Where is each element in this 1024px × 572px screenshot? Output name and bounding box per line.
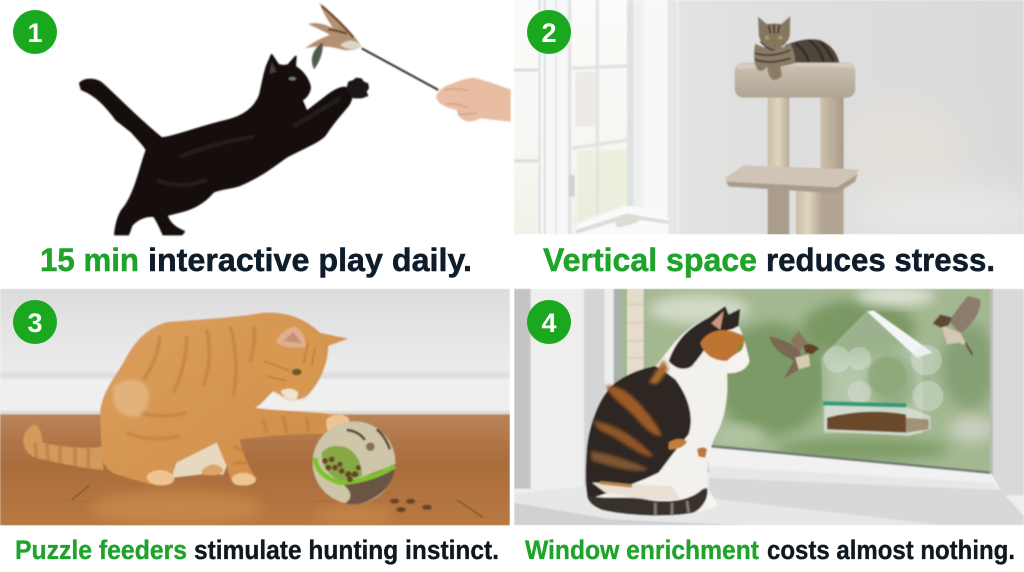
badge 1: 1 — [27, 18, 43, 48]
window frame — [572, 0, 679, 234]
photo: orange cat pawing puzzle feeder ball — [0, 289, 510, 526]
ears inner — [711, 311, 724, 330]
bird left — [769, 337, 805, 379]
cat body — [80, 55, 351, 234]
cat eye — [289, 77, 296, 80]
cat head dark patch — [669, 306, 740, 369]
bird right — [949, 296, 980, 333]
cat body — [779, 39, 839, 63]
cat paw — [347, 78, 369, 98]
feather tuft — [305, 3, 362, 69]
cat tail — [23, 424, 103, 470]
brick wall — [627, 289, 644, 376]
orange head patch — [700, 330, 744, 361]
window glass left — [514, 0, 538, 234]
chest patches — [669, 439, 687, 449]
cat muzzle — [727, 348, 749, 373]
white belly — [172, 442, 228, 478]
panel 2: vertical space — [514, 0, 1024, 278]
cat eye and nose — [292, 369, 302, 375]
badge 2: 2 — [541, 18, 557, 48]
cat chest and front legs — [754, 43, 795, 80]
window outer frame — [627, 0, 634, 207]
kibble in ball — [322, 456, 361, 482]
cat body — [100, 312, 349, 485]
cat fur highlights — [157, 98, 340, 185]
caption 1: 15 min — [40, 242, 139, 278]
window sash — [538, 0, 571, 234]
badge 3: 3 — [27, 308, 43, 338]
caption 3 — [15, 535, 499, 565]
floor reflection — [90, 491, 263, 524]
caption 2: Vertical space — [543, 242, 757, 278]
lower shelf — [727, 167, 857, 192]
cat head shading — [272, 390, 311, 402]
right frame — [990, 289, 1024, 495]
cat ear — [276, 327, 306, 348]
photo: calico cat watching birds at window feeder — [514, 286, 1024, 525]
wand stick — [362, 48, 438, 90]
wall — [678, 0, 1024, 234]
cat dark coat — [586, 366, 691, 499]
badge 1 — [13, 10, 57, 54]
photo: black cat leaping at feather wand — [80, 3, 511, 234]
floor — [0, 414, 510, 526]
wall — [0, 289, 510, 374]
posts — [768, 95, 789, 170]
badge 3 — [13, 300, 57, 344]
inner wall — [514, 474, 1024, 515]
badge 4 — [527, 300, 571, 344]
caption 2: reduces stress. — [766, 242, 995, 278]
upper ring — [735, 63, 855, 98]
window sill — [584, 486, 934, 525]
cat stripes — [127, 326, 308, 463]
baseboard — [0, 378, 510, 412]
caption 2 — [543, 242, 995, 278]
cat head — [758, 16, 790, 51]
panel 1: interactive play — [13, 3, 511, 278]
orange mottled patches — [590, 359, 669, 471]
cat body white base — [586, 306, 749, 516]
feeder — [822, 312, 922, 433]
photo: tabby cat on carpeted cat tree by window — [514, 0, 1024, 243]
hand — [436, 78, 511, 122]
cat right-hind paw — [202, 465, 223, 475]
panel 4: window enrichment — [514, 286, 1024, 565]
caption 4: Window enrichment — [525, 535, 759, 565]
lower white stripe and tail — [592, 483, 680, 499]
caption 3: Puzzle feeders — [15, 535, 187, 565]
loose kibble — [390, 498, 432, 512]
puzzle ball — [313, 421, 395, 504]
badge 4: 4 — [541, 308, 557, 338]
window glass right — [571, 0, 627, 223]
bottom frame — [709, 445, 1000, 489]
badge 2 — [527, 10, 571, 54]
cat eye — [737, 344, 742, 352]
caption 4 — [525, 535, 1015, 565]
caption 3: stimulate hunting instinct. — [194, 535, 499, 565]
caption 1: interactive play daily. — [148, 242, 472, 278]
panel 3: puzzle feeders — [0, 289, 510, 565]
cat paws — [147, 470, 174, 485]
ear inner — [269, 62, 277, 74]
garden through glass — [622, 286, 995, 475]
